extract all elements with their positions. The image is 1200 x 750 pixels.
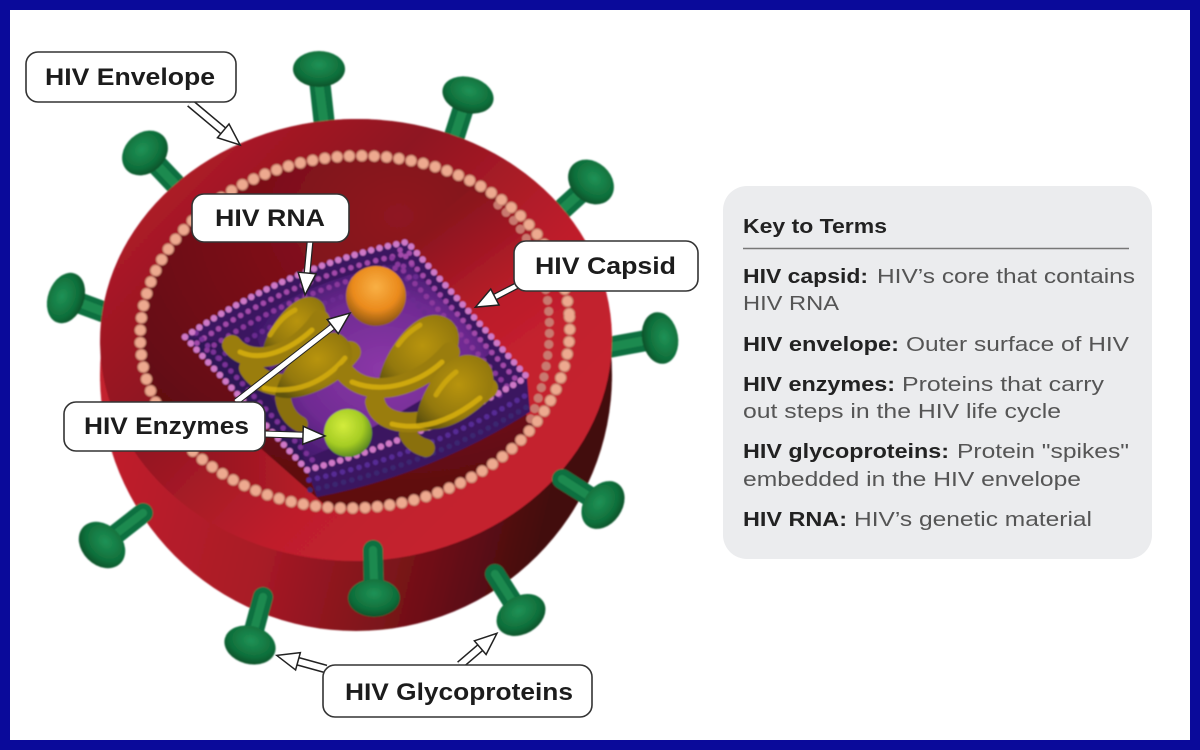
spikes in front of sphere xyxy=(69,473,633,670)
label: HIV RNA xyxy=(192,194,349,242)
arrow: enzymes to orange xyxy=(236,326,334,402)
term: HIV glycoproteins xyxy=(743,440,1129,491)
envelope sphere body xyxy=(100,119,612,631)
RNA helix left xyxy=(232,297,352,424)
label: HIV Envelope: HIV Envelope xyxy=(45,64,215,91)
term: HIV glycoproteins: Protein "spikes" xyxy=(957,440,1129,463)
arrow: enzymes to green xyxy=(264,434,304,435)
term: HIV enzymes: out steps in the HIV life cycle xyxy=(743,400,1061,423)
panel: key to terms xyxy=(723,186,1152,559)
enzyme: green sphere xyxy=(324,409,372,457)
RNA helix right xyxy=(346,315,493,448)
term: HIV capsid: HIV’s core that contains xyxy=(877,265,1135,288)
term: HIV envelope: Outer surface of HIV xyxy=(906,333,1129,356)
arrow: envelope xyxy=(190,103,224,132)
label: HIV Envelope xyxy=(26,52,236,102)
term: HIV enzymes: Proteins that carry xyxy=(902,373,1105,396)
spikes behind sphere xyxy=(40,51,682,367)
arrow: capsid xyxy=(494,284,520,298)
enzyme: orange sphere xyxy=(346,266,406,326)
label: HIV Glycoproteins: HIV Glycoproteins xyxy=(345,679,573,706)
term: HIV capsid xyxy=(743,265,1135,315)
term: HIV capsid: HIV capsid: xyxy=(743,265,868,288)
arrow: glycoproteins left xyxy=(297,661,326,669)
label: HIV Enzymes xyxy=(64,402,265,451)
term: HIV envelope xyxy=(743,333,1129,356)
arrow: RNA xyxy=(307,242,310,274)
panel heading: Key to Terms xyxy=(743,215,887,238)
interior lit wedges xyxy=(198,196,570,506)
envelope cut face xyxy=(96,115,616,565)
arrow: glycoproteins right xyxy=(460,647,481,665)
term: HIV enzymes xyxy=(743,373,1105,423)
term: HIV glycoproteins: embedded in the HIV envelope xyxy=(743,468,1081,491)
label: HIV RNA: HIV RNA xyxy=(215,205,325,232)
label: HIV Capsid: HIV Capsid xyxy=(535,253,676,280)
inner bead row, right side xyxy=(498,205,549,425)
lipid bead ring xyxy=(128,141,582,523)
interior cavity xyxy=(128,141,582,523)
term: HIV RNA xyxy=(743,508,1092,531)
term: HIV RNA: HIV RNA: xyxy=(743,508,847,531)
term: HIV envelope: HIV envelope: xyxy=(743,333,899,356)
diagram: HIV virion xyxy=(40,51,682,670)
term: HIV glycoproteins: HIV glycoproteins: xyxy=(743,440,949,463)
term: HIV enzymes: HIV enzymes: xyxy=(743,373,895,396)
capsid xyxy=(185,242,530,497)
label: HIV Capsid xyxy=(514,241,698,291)
label: HIV Enzymes: HIV Enzymes xyxy=(84,413,249,440)
term: HIV capsid: HIV RNA xyxy=(743,292,839,315)
label: HIV Glycoproteins xyxy=(323,665,592,717)
term: HIV RNA: HIV’s genetic material xyxy=(854,508,1092,531)
